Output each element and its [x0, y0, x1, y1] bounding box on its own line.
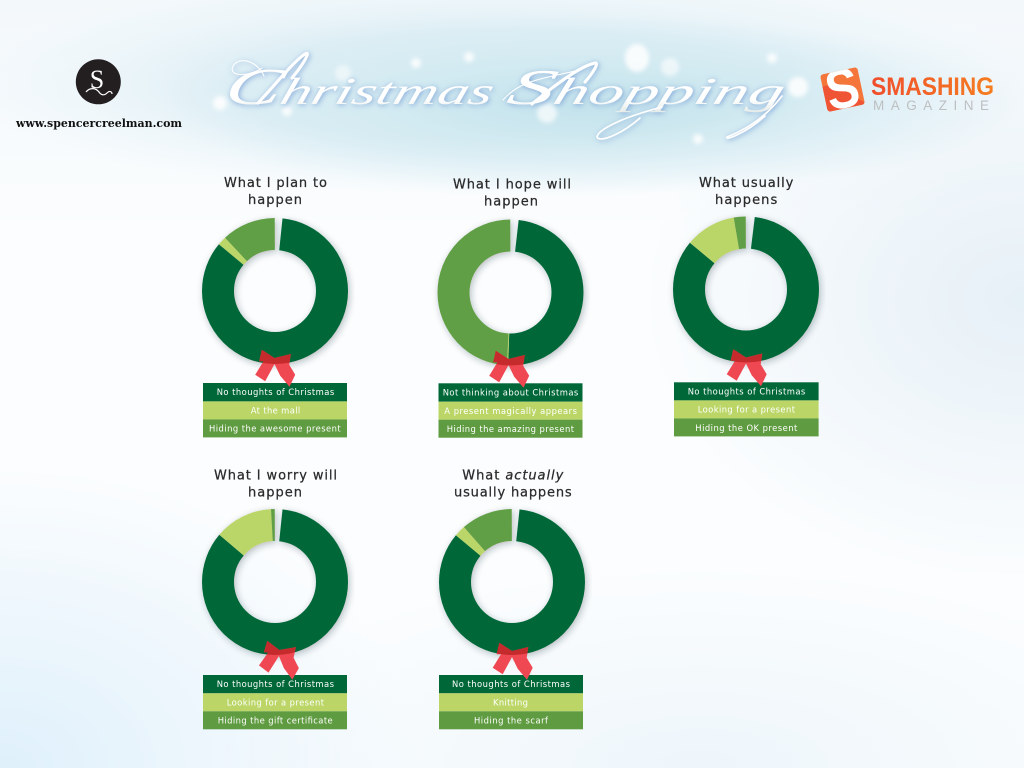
heading: happen	[484, 194, 538, 210]
legend	[438, 383, 582, 438]
legend: No thoughts of Christmas	[688, 386, 805, 396]
panel: What usually happens	[674, 176, 819, 436]
heading	[214, 468, 337, 500]
icon: red bow	[258, 640, 301, 680]
panel: What I hope will happen	[438, 178, 582, 438]
heading	[699, 176, 794, 208]
heading	[454, 468, 572, 500]
legend: Hiding the awesome present	[209, 424, 341, 434]
title: Christmas Shopping	[219, 53, 793, 139]
donut chart	[218, 525, 332, 639]
legend	[203, 675, 347, 729]
legend: Hiding the OK present	[695, 423, 798, 433]
legend: Hiding the gift certificate	[218, 715, 333, 725]
legend: Hiding the scarf	[474, 715, 549, 725]
logo badge	[820, 67, 865, 112]
legend: No thoughts of Christmas	[217, 679, 334, 689]
legend: Looking for a present	[698, 405, 796, 415]
heading: happens	[715, 193, 778, 208]
heading: What usually	[699, 176, 794, 191]
heading	[224, 176, 327, 208]
title flourishes	[232, 53, 782, 139]
badge darker fold	[822, 86, 864, 112]
legend: At the mall	[251, 406, 300, 416]
legend: No thoughts of Christmas	[452, 679, 570, 689]
legend: A present magically appears	[444, 406, 577, 416]
heading: What I plan to	[224, 176, 327, 191]
panel: What actually usually happens	[439, 468, 583, 729]
panel: What I worry will happen	[203, 468, 347, 729]
legend: Hiding the amazing present	[447, 424, 575, 434]
title word: Christmas: Christmas	[219, 59, 503, 116]
Smashing Magazine logo	[820, 68, 993, 112]
snow bokeh lights	[213, 44, 808, 144]
legend: No thoughts of Christmas	[217, 387, 334, 397]
panel: What I plan to happen	[203, 176, 347, 437]
heading: What I worry will	[214, 468, 337, 484]
legend	[674, 382, 819, 436]
title word: Shopping: Shopping	[502, 61, 793, 116]
heading: happen	[248, 486, 302, 500]
donut chart	[689, 232, 803, 346]
logo monogram: S	[90, 65, 104, 94]
icon: red bow	[255, 350, 295, 387]
icon: red bow	[727, 349, 767, 386]
heading: What actually	[462, 468, 564, 484]
creator logo: spencer creelman	[15, 59, 182, 130]
legend	[203, 383, 347, 437]
icon: red bow	[489, 351, 529, 388]
monogram flourish	[86, 89, 112, 95]
legend	[439, 675, 583, 729]
donut chart	[455, 525, 569, 639]
legend: Not thinking about Christmas	[443, 387, 578, 397]
donut chart	[454, 236, 568, 350]
website address: www.spencercreelman.com	[15, 116, 182, 130]
heading	[453, 178, 571, 210]
heading: usually happens	[454, 486, 572, 500]
donut chart	[218, 234, 332, 348]
legend: Looking for a present	[227, 697, 325, 707]
logo circle	[76, 59, 121, 104]
MAGAZINE wordmark: MAGAZINE	[873, 98, 989, 113]
legend: Knitting	[493, 697, 528, 707]
heading: What I hope will	[453, 178, 571, 192]
SMASHING wordmark: SMASHING	[871, 73, 994, 101]
heading: happen	[248, 193, 302, 208]
badge letter S: S	[819, 54, 865, 123]
icon: red bow	[493, 643, 533, 680]
